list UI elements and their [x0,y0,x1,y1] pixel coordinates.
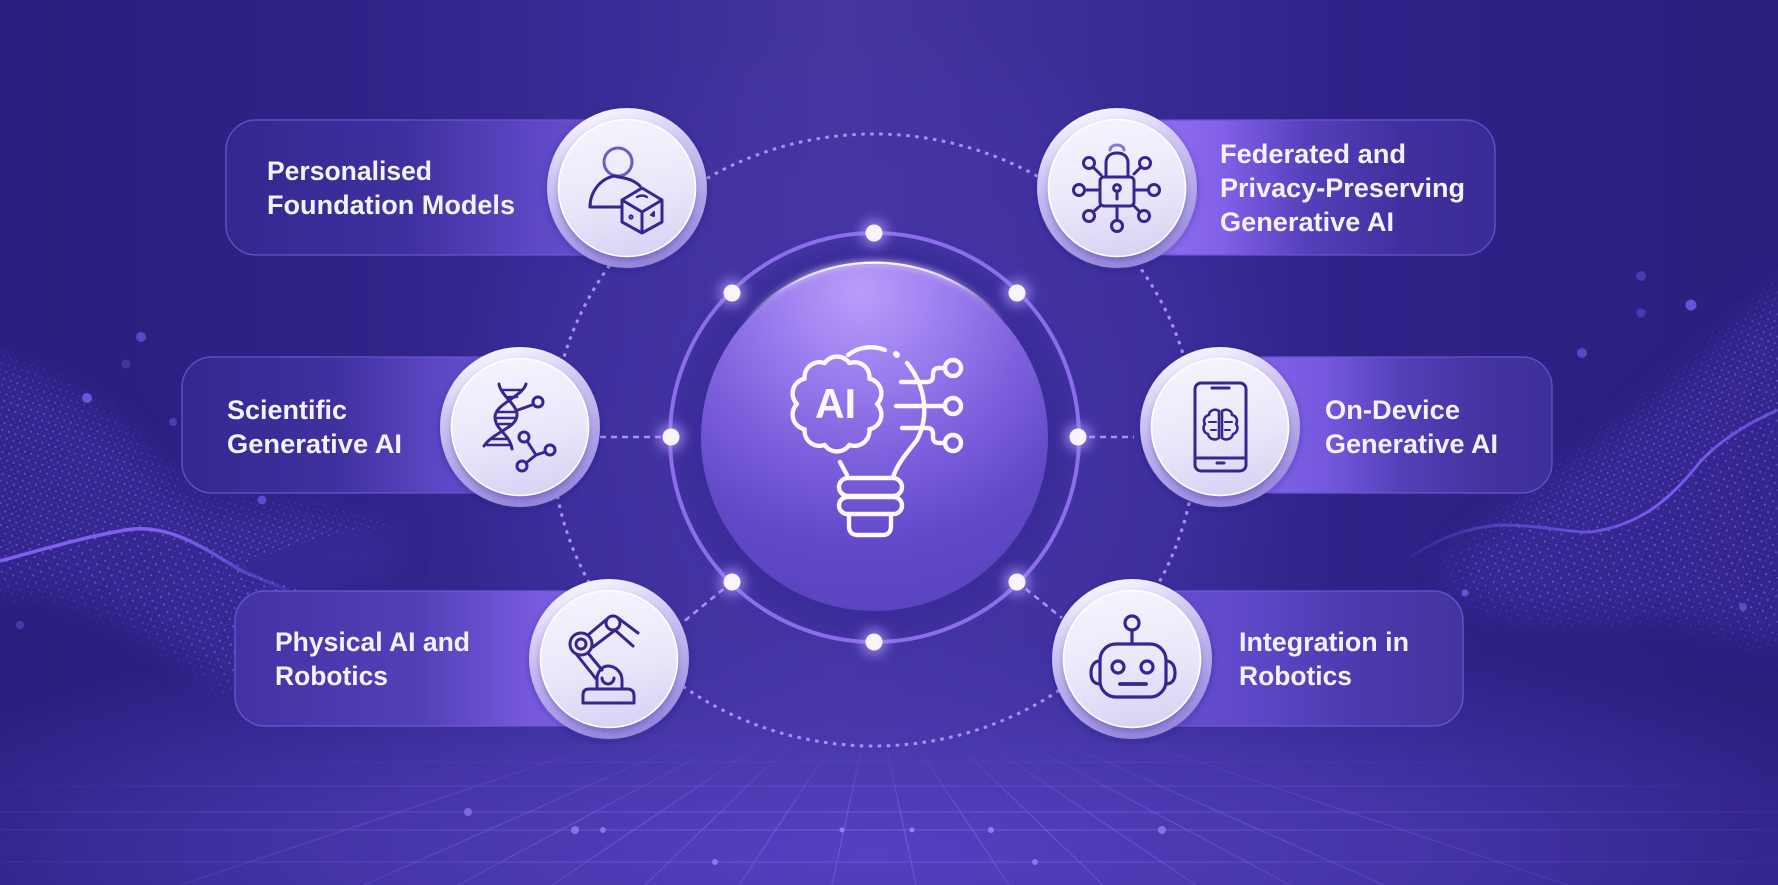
panel: scientific generative ai [182,347,600,507]
dashed connectors from ring to badges [600,437,1134,623]
label: Federated and [1220,139,1406,169]
label [275,627,470,691]
panel: integration in robotics [1052,579,1463,739]
background: right particle wave [1410,270,1778,659]
hub dark backing disc [676,242,1072,638]
background: left particle wave [0,332,402,702]
label: Robotics [275,661,388,691]
label: Foundation Models [267,190,515,220]
card [226,120,627,255]
label: Personalised [267,156,432,186]
panel: on-device generative ai [1140,347,1552,507]
ring nodes [658,220,1091,655]
label: Robotics [1239,661,1352,691]
label: Generative AI [1325,429,1498,459]
central hub [658,220,1091,655]
icon badge [547,108,707,268]
label: Generative AI [1220,207,1394,237]
icon: person with cube [590,148,662,233]
icon: lock network [1074,145,1160,232]
hub sphere [701,264,1048,611]
label: Integration in [1239,627,1409,657]
icon badge [1140,347,1300,507]
icon: robot head [1091,616,1175,697]
background: perspective grid floor [0,745,1778,885]
card [1117,120,1495,255]
icon text: AI: AI [815,380,856,427]
hub top highlight [743,263,1006,323]
dashed outer orbit [552,134,1196,746]
label: Scientific [227,395,347,425]
icon: robot arm [570,616,638,703]
panel: physical ai and robotics [235,579,689,739]
icon: phone with brain [1195,383,1246,471]
hub ring [670,233,1079,642]
card [1132,591,1463,726]
card [182,357,520,493]
label [267,156,515,220]
icon badge [1037,108,1197,268]
card [1220,357,1552,493]
panel: personalised foundation models [226,108,707,268]
icon badge [440,347,600,507]
card [235,591,609,726]
label: Privacy-Preserving [1220,173,1465,203]
label [1220,139,1465,237]
label: On-Device [1325,395,1460,425]
icon badge [1052,579,1212,739]
icon: dna and molecule [484,384,555,471]
icon badge [529,579,689,739]
icon: ai light bulb [793,347,961,535]
label [227,395,402,459]
label: Physical AI and [275,627,470,657]
label [1325,395,1498,459]
label [1239,627,1409,691]
panel: federated and privacy-preserving generative ai [1037,108,1495,268]
label: Generative AI [227,429,402,459]
